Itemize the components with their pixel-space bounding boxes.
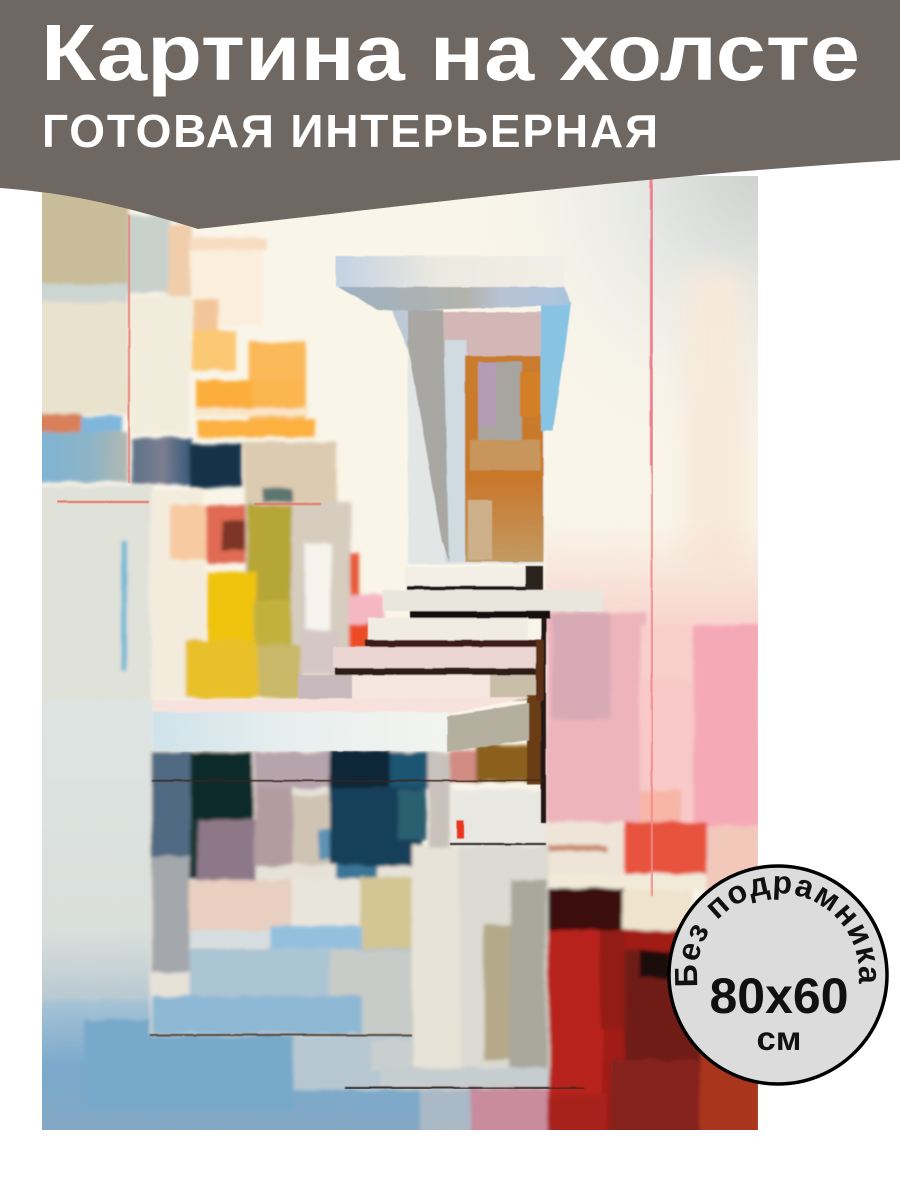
painting: abstract canvas with staircase [36, 176, 760, 1136]
reflection: dark blocks under slab [152, 750, 430, 1035]
badge arc text: Без подрамника [674, 876, 876, 986]
mid left blocks [36, 442, 350, 706]
badge size: 80x60 [710, 968, 848, 1024]
red accents beside steps [348, 552, 384, 648]
subtitle: ГОТОВАЯ ИНТЕРЬЕРНАЯ [42, 105, 658, 157]
lower left: pale column and blue field [42, 702, 422, 1130]
upper left colour blocks [36, 190, 266, 487]
large slab [153, 697, 530, 752]
header banner [0, 0, 900, 229]
badge unit: см [756, 1020, 802, 1057]
pink wall, right [546, 520, 760, 827]
size badge [667, 864, 889, 1086]
lower centre: cream column and weathered panel [380, 745, 548, 1134]
lower right red blocks [546, 822, 760, 1136]
dark post right of stairs [527, 618, 546, 823]
staircase steps [298, 566, 603, 701]
orange blocks [190, 250, 315, 437]
doorway and canopy [336, 256, 571, 564]
thin lines across the painting [57, 176, 653, 1089]
title: Картина на холсте [41, 8, 860, 97]
